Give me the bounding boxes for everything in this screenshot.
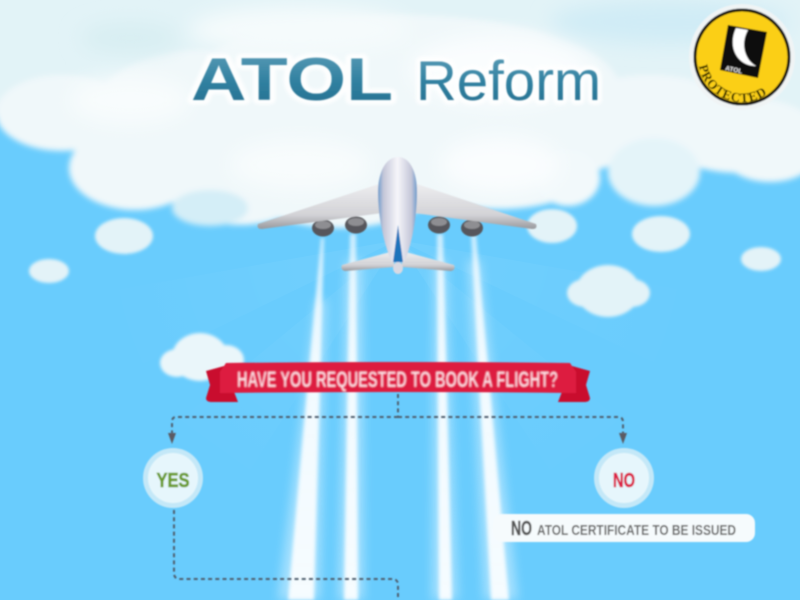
no node: NO [613, 470, 635, 492]
main cloud bank [0, 0, 800, 228]
upper cloud shading [70, 0, 790, 193]
question banner [206, 362, 590, 402]
badge: ATOL protected [689, 4, 795, 107]
cloud [29, 259, 69, 283]
contrail glows [278, 260, 518, 600]
wings [258, 183, 536, 229]
cloud [160, 333, 244, 381]
badge: ATOL protected: ATOL [725, 65, 743, 76]
small clouds [29, 209, 781, 381]
sun rays [60, 240, 740, 470]
cloud [632, 216, 690, 252]
title: Reform [416, 49, 601, 112]
no node [594, 448, 654, 508]
cloud [527, 209, 577, 243]
title [191, 46, 601, 113]
title: ATOL [191, 46, 393, 113]
no outcome label [493, 514, 755, 542]
tail fin [393, 225, 403, 262]
yes node: YES [156, 470, 190, 492]
cloud [95, 218, 153, 254]
engines [312, 216, 483, 236]
title: Reform [416, 49, 601, 112]
title: ATOL [191, 46, 393, 113]
flowchart connectors [172, 394, 623, 600]
tailplane [341, 251, 455, 271]
arrowhead: yes [168, 433, 176, 444]
arrowhead: no [619, 433, 627, 444]
cloud [567, 265, 650, 317]
fuselage [378, 157, 417, 262]
yes node [143, 448, 203, 508]
badge: ATOL protected: PROTECTED [698, 64, 766, 104]
no outcome label: NO [511, 518, 532, 540]
airplane [258, 157, 536, 274]
cloud [741, 247, 781, 271]
question banner: HAVE YOU REQUESTED TO BOOK A FLIGHT? [237, 367, 558, 392]
contrails [288, 234, 509, 600]
no outcome label: ATOL CERTIFICATE TO BE ISSUED [537, 522, 736, 539]
